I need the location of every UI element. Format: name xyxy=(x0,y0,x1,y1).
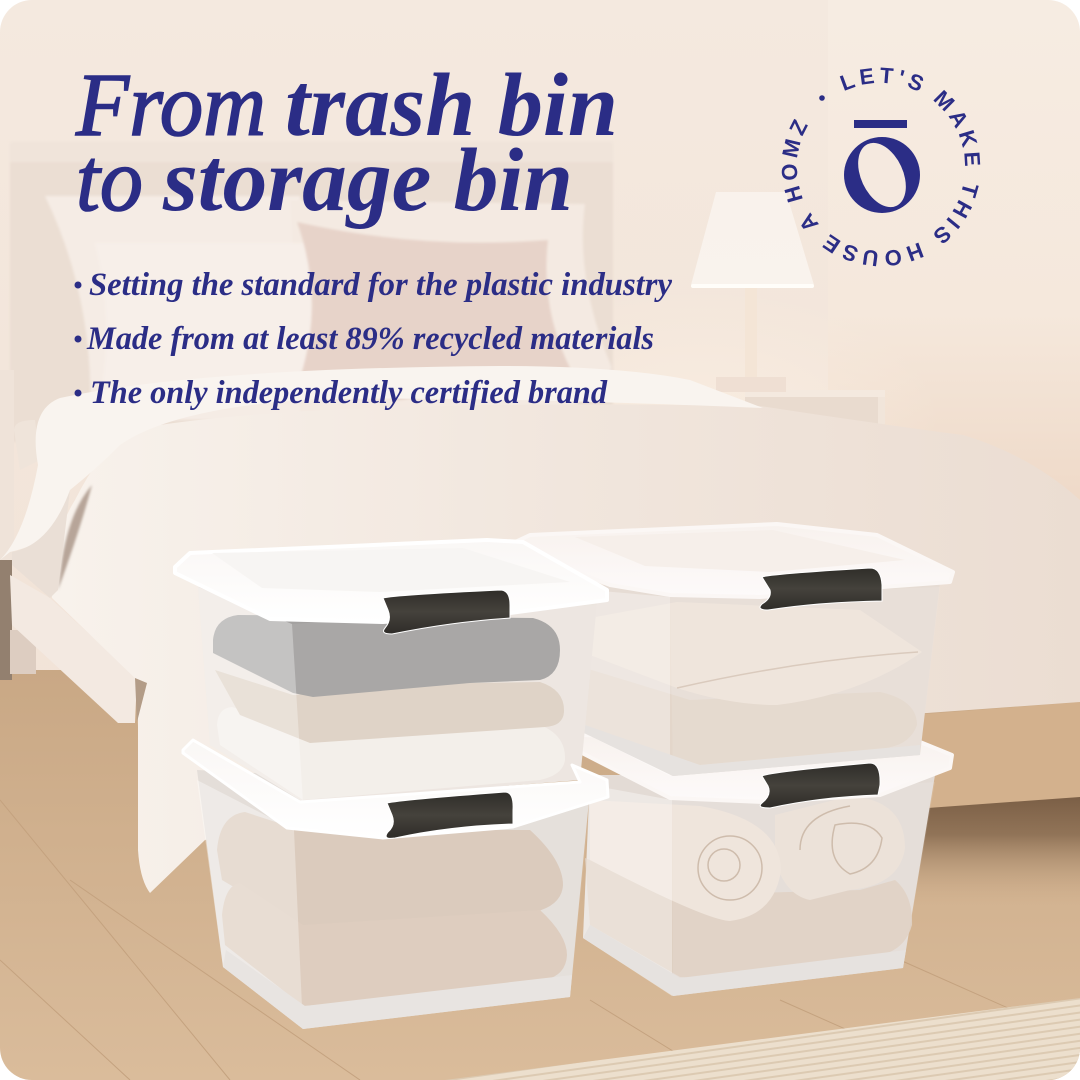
blanket: left roll xyxy=(590,800,781,921)
bin left wall xyxy=(583,785,672,996)
floor xyxy=(0,670,1080,1080)
sheet fold xyxy=(14,420,40,470)
bin lid panel xyxy=(212,548,570,592)
bin body back xyxy=(603,585,925,760)
bin handle xyxy=(383,590,510,634)
towel: grey xyxy=(213,615,560,697)
fold shadow xyxy=(58,485,92,590)
bed frame shadow left xyxy=(0,560,36,680)
bullet 2: Made from at least 89% recycled materials xyxy=(86,321,654,357)
separator dot xyxy=(819,95,825,101)
blanket: upper folded xyxy=(217,812,563,928)
bin: bottom right xyxy=(580,735,952,996)
table lamp xyxy=(691,192,814,392)
towel: beige xyxy=(215,670,564,743)
bin body back xyxy=(583,775,935,996)
logo ring xyxy=(844,135,920,215)
bin left wall xyxy=(198,781,302,1004)
blanket: right roll xyxy=(794,805,883,900)
title line 1 xyxy=(75,56,618,155)
bin front wall xyxy=(670,587,940,776)
blanket: lower folded xyxy=(222,883,567,1006)
bullet list xyxy=(74,267,672,411)
pillows xyxy=(45,196,612,420)
bin left wall xyxy=(198,587,303,802)
bin lid xyxy=(513,524,953,597)
bullet 1: Setting the standard for the plastic industry xyxy=(89,267,672,303)
bin lid panel xyxy=(606,549,903,572)
duvet xyxy=(0,366,1080,893)
duvet hem crease xyxy=(135,678,147,722)
blanket: flat bottom xyxy=(585,858,912,978)
duvet top fold xyxy=(0,366,763,560)
bin: bottom left lid xyxy=(183,740,608,838)
bed base left xyxy=(10,575,137,723)
bin front wall xyxy=(698,782,935,907)
bin handle xyxy=(760,763,880,808)
bin front wall xyxy=(294,805,590,1029)
bin handle xyxy=(760,568,882,610)
bin front wall xyxy=(292,605,597,802)
wall xyxy=(0,0,1080,720)
bin: top left xyxy=(175,540,607,802)
title xyxy=(75,56,618,230)
logo badge xyxy=(782,68,980,266)
blanket: lower folded xyxy=(670,692,917,764)
nightstand xyxy=(745,390,885,424)
bin body back xyxy=(197,770,590,1029)
bin lid xyxy=(175,540,607,622)
bin left wall xyxy=(586,592,670,754)
title line 2: to xyxy=(76,131,143,230)
bin: bottom left xyxy=(197,770,590,1029)
bin lid xyxy=(183,740,608,838)
title line 1: From xyxy=(75,56,266,155)
bullet 3: The only independently certified brand xyxy=(90,375,607,411)
bed base right xyxy=(918,702,1080,882)
circular tagline: LET'S MAKE THIS HOUSE A HOMZ xyxy=(782,68,980,266)
title line 2: storage bin xyxy=(162,131,573,230)
towel: white xyxy=(217,707,565,800)
bin body back xyxy=(198,587,597,802)
title line 1: trash bin xyxy=(285,56,618,155)
bin: top right xyxy=(513,524,953,776)
headboard xyxy=(11,162,612,404)
bin handle xyxy=(386,792,513,838)
bin lid xyxy=(580,735,952,802)
pillow xyxy=(719,694,830,705)
rug xyxy=(445,998,1080,1080)
logo macron xyxy=(854,120,907,128)
